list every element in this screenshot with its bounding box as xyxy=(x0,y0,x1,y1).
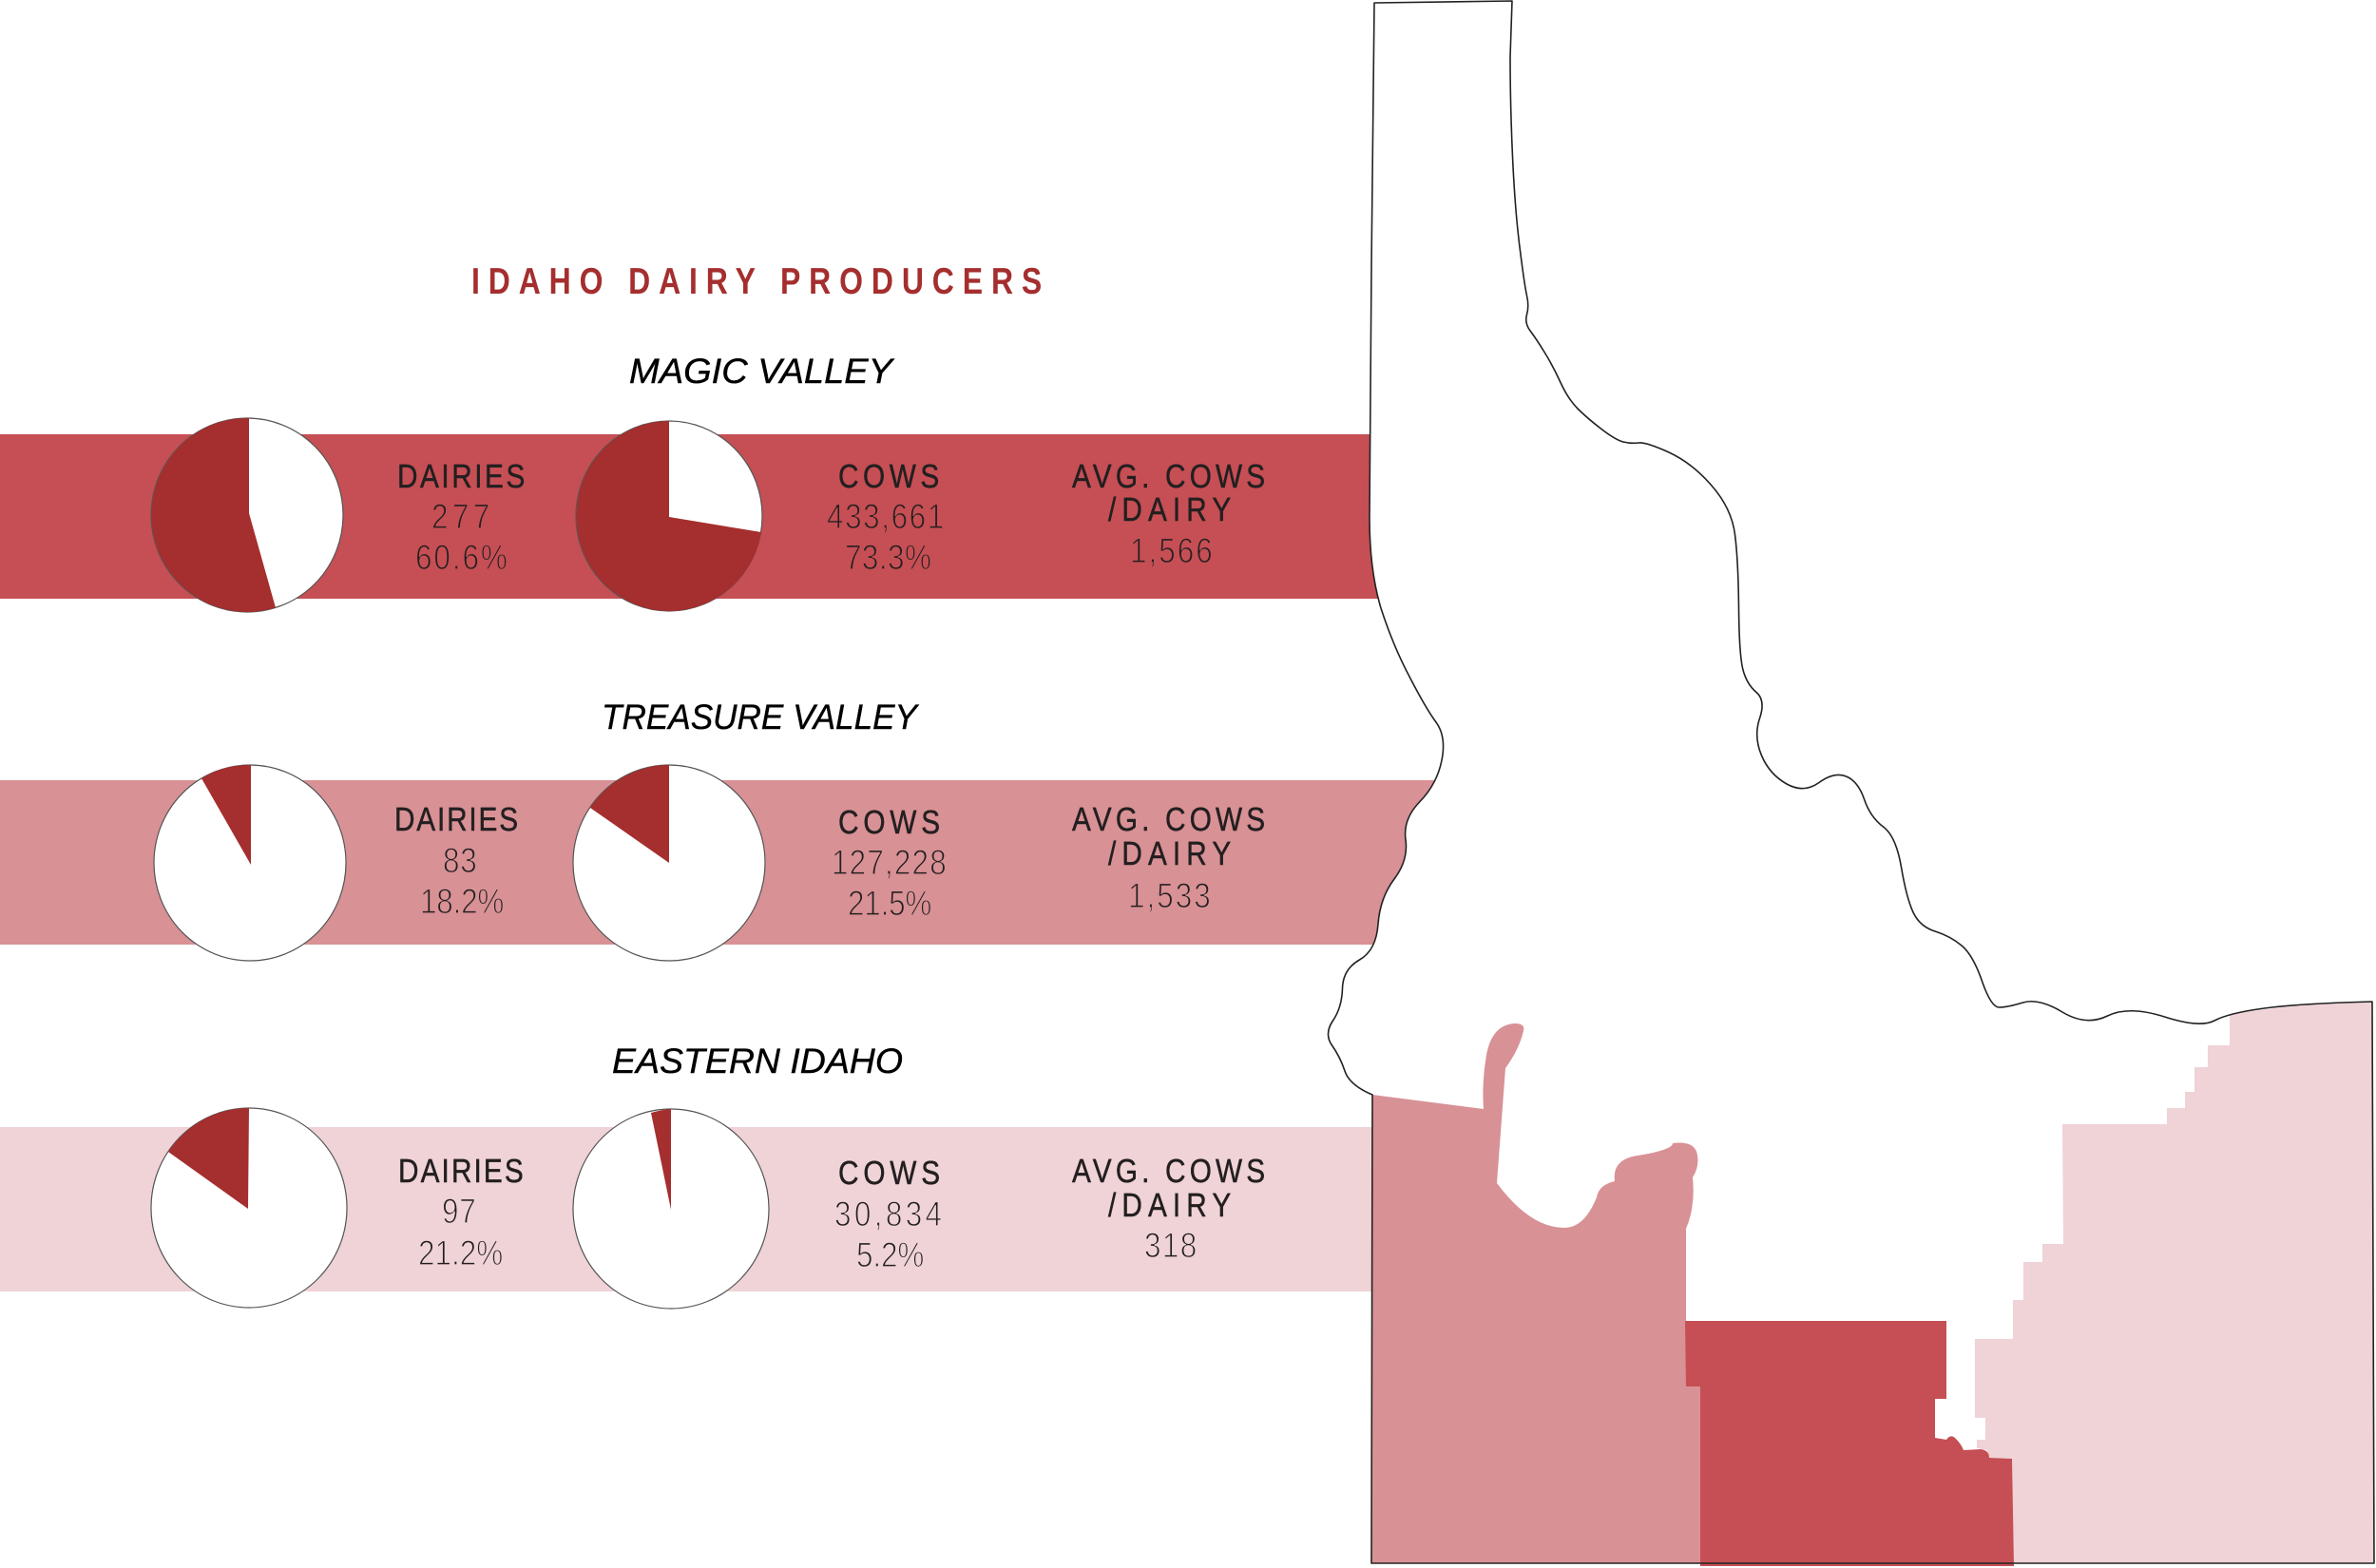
text block: cows: 73.3% xyxy=(845,538,931,577)
panel: Eastern Idaho xyxy=(0,1042,1426,1309)
region: Magic Valley xyxy=(1685,1321,2014,1566)
text block: average cows per dairy: /DAIRY xyxy=(1108,835,1231,872)
text block: average cows per dairy xyxy=(1072,1153,1265,1265)
map: state outline xyxy=(1328,1,2374,1563)
text block: dairies: 60.6% xyxy=(415,538,508,577)
pie chart: dairies 21.2% xyxy=(151,1108,347,1308)
text block: cows: 127,228 xyxy=(832,843,947,882)
text block: average cows per dairy: 318 xyxy=(1144,1226,1197,1265)
text block: dairies: 18.2% xyxy=(420,882,504,921)
pie chart: dairies 60.6% xyxy=(151,418,343,612)
text block: dairies: 277 xyxy=(431,497,489,536)
heading: Eastern Idaho: EASTERN IDAHO xyxy=(612,1042,903,1080)
text block: dairies xyxy=(394,801,518,921)
text block: dairies: DAIRIES xyxy=(397,458,525,495)
text block: average cows per dairy: AVG. COWS xyxy=(1072,458,1265,495)
map: state fill xyxy=(1328,1,2374,1563)
pie chart: cows 21.5% xyxy=(573,765,765,961)
text block: cows: COWS xyxy=(838,458,939,495)
text block: dairies: DAIRIES xyxy=(398,1153,524,1190)
text block: cows: 5.2% xyxy=(856,1235,924,1274)
text block: cows: 30,834 xyxy=(834,1195,942,1233)
text block: average cows per dairy: 1,533 xyxy=(1128,876,1211,915)
panel: Treasure Valley xyxy=(0,698,1483,961)
band: Magic Valley xyxy=(0,434,1426,599)
text block: cows xyxy=(827,458,944,577)
band: Eastern Idaho xyxy=(0,1127,1426,1291)
text block: dairies: 83 xyxy=(443,841,477,880)
text block: cows: 21.5% xyxy=(848,884,931,923)
text block: average cows per dairy xyxy=(1072,801,1265,915)
text block: average cows per dairy: /DAIRY xyxy=(1108,491,1231,528)
region: Eastern Idaho xyxy=(1975,1002,2374,1563)
text block: cows: COWS xyxy=(838,804,940,841)
region: Treasure Valley xyxy=(1371,1023,1700,1563)
text block: cows xyxy=(832,804,947,923)
text block: dairies xyxy=(398,1153,524,1272)
text block: average cows per dairy: AVG. COWS xyxy=(1072,1153,1265,1190)
pie chart: cows 5.2% xyxy=(573,1109,769,1309)
text block: cows: COWS xyxy=(838,1155,940,1192)
heading: Magic Valley: MAGIC VALLEY xyxy=(629,352,894,391)
heading: Treasure Valley: TREASURE VALLEY xyxy=(602,698,919,736)
pie chart: cows 73.3% xyxy=(576,421,762,611)
text block: cows: 433,661 xyxy=(827,497,944,536)
title: IDAHO DAIRY PRODUCERS xyxy=(471,261,1042,302)
pie chart: dairies 18.2% xyxy=(154,765,346,961)
panel: Magic Valley xyxy=(0,352,1426,612)
text block: average cows per dairy: /DAIRY xyxy=(1108,1187,1231,1224)
text block: dairies: 21.2% xyxy=(418,1233,503,1272)
text block: average cows per dairy: 1,566 xyxy=(1130,531,1213,570)
text block: average cows per dairy xyxy=(1072,458,1265,570)
text block: dairies: DAIRIES xyxy=(394,801,518,838)
text block: dairies: 97 xyxy=(442,1192,476,1231)
text block: cows xyxy=(834,1155,942,1274)
map of Idaho with dairy regions xyxy=(1328,1,2374,1566)
text block: average cows per dairy: AVG. COWS xyxy=(1072,801,1265,838)
band: Treasure Valley xyxy=(0,780,1483,945)
text block: dairies xyxy=(397,458,525,577)
